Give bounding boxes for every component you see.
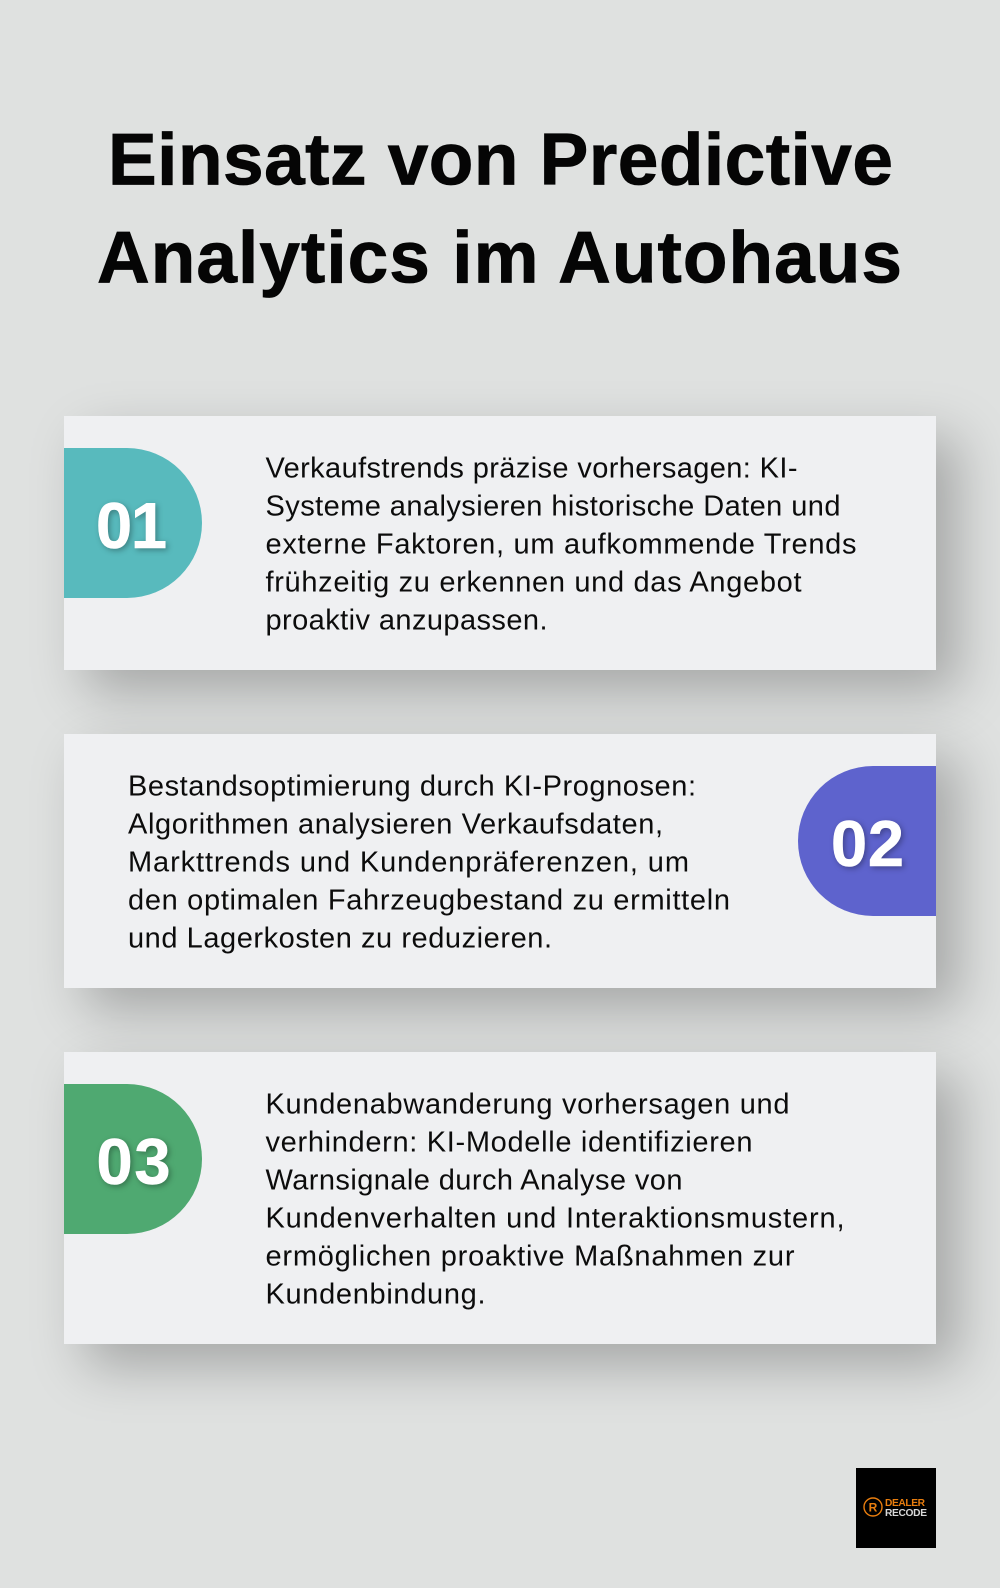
- title: Einsatz von Predictive: [108, 120, 893, 200]
- panel: step 01: [64, 416, 936, 670]
- title: Analytics im Autohaus: [97, 218, 902, 298]
- text: step 02 description: Markttrends und Kundenpräferenzen, um: [128, 846, 689, 878]
- text: step 03 description: Warnsignale durch Analyse von: [266, 1164, 682, 1196]
- text: step 02 description: [128, 770, 730, 954]
- text: step 03 description: [266, 1088, 844, 1310]
- panel: step 03: [64, 1052, 936, 1344]
- text: step 02 description: und Lagerkosten zu reduzieren.: [128, 922, 552, 954]
- text: step 01 description: Systeme analysieren historische Daten und: [266, 490, 840, 522]
- panel: step 02: [64, 734, 936, 988]
- badge: 02: [798, 766, 936, 916]
- text: step 01 description: frühzeitig zu erkennen und das Angebot: [266, 566, 802, 598]
- text: step 03 description: ermöglichen proaktive Maßnahmen zur: [266, 1240, 795, 1272]
- badge: 03: [64, 1084, 202, 1234]
- text: step 01 description: proaktiv anzupassen.: [266, 604, 548, 636]
- text: step 03 description: Kundenabwanderung vorhersagen und: [266, 1088, 790, 1120]
- badge: 01: [64, 448, 202, 598]
- text: step 01 description: [266, 452, 856, 636]
- text: step 02 description: Bestandsoptimierung durch KI-Prognosen:: [128, 770, 696, 802]
- text: step 03 description: Kundenverhalten und Interaktionsmustern,: [266, 1202, 844, 1234]
- badge: 03: 03: [96, 1125, 170, 1198]
- logo: Dealer Recode: R: [869, 1500, 878, 1514]
- text: step 03 description: verhindern: KI-Modelle identifizieren: [266, 1126, 752, 1158]
- text: step 01 description: Verkaufstrends präzise vorhersagen: KI-: [266, 452, 798, 484]
- text: step 02 description: den optimalen Fahrzeugbestand zu ermitteln: [128, 884, 730, 916]
- badge: 01: 01: [96, 489, 167, 562]
- text: step 01 description: externe Faktoren, um aufkommende Trends: [266, 528, 856, 560]
- text: step 02 description: Algorithmen analysieren Verkaufsdaten,: [128, 808, 663, 840]
- title: [97, 120, 902, 298]
- text: step 03 description: Kundenbindung.: [266, 1278, 486, 1310]
- logo: Dealer Recode: DEALER: [885, 1498, 926, 1509]
- logo: Dealer Recode: [856, 1468, 936, 1548]
- badge: 02: 02: [831, 807, 904, 880]
- logo: Dealer Recode: RECODE: [885, 1508, 927, 1519]
